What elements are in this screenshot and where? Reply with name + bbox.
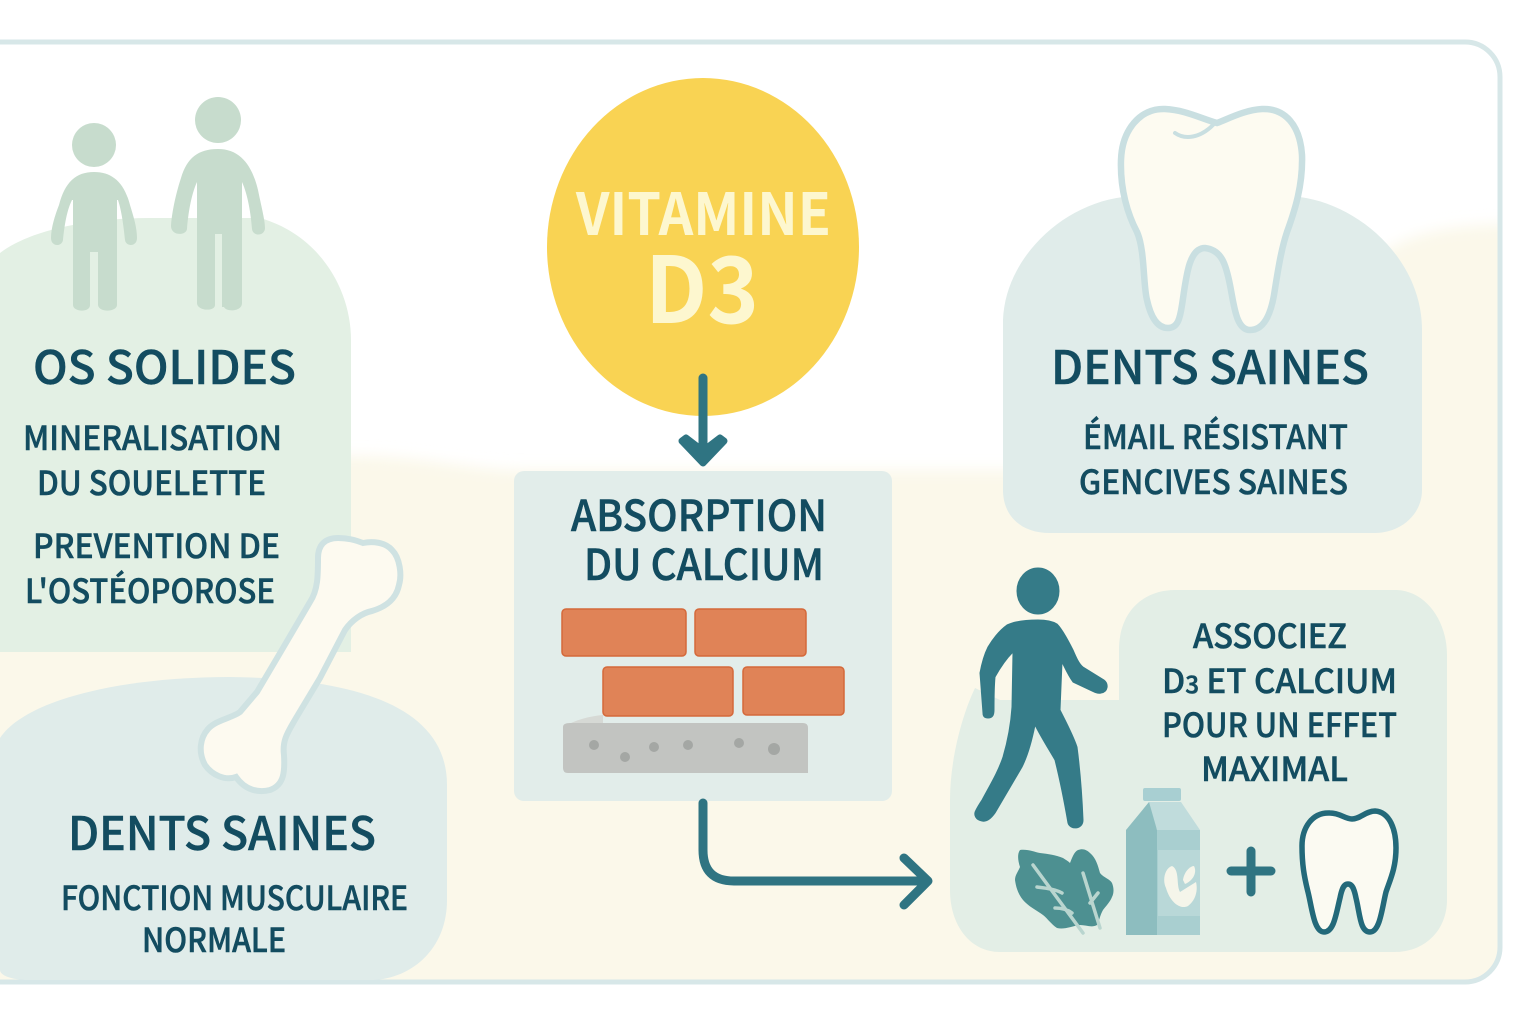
icon: bricks — [562, 609, 844, 716]
icon: bone — [201, 538, 400, 791]
text: prévention: PREVENTION DE — [33, 520, 280, 568]
heading: os solides: OS SOLIDES — [33, 332, 296, 398]
title: D3: D3 — [645, 217, 759, 350]
text: prévention: L'OSTÉOPOROSE — [25, 565, 275, 613]
icon: concrete base — [563, 715, 808, 773]
heading: dents saines gauche: DENTS SAINES — [68, 798, 376, 864]
text: associez: POUR UN EFFET — [1162, 699, 1397, 747]
icon: leafy greens — [1015, 849, 1114, 933]
panel: absorption du calcium — [514, 471, 892, 801]
text: associez — [1162, 610, 1397, 791]
panel: associez — [950, 568, 1447, 952]
panel: fonction musculaire — [0, 538, 447, 980]
panel: dents saines droite — [1003, 109, 1422, 533]
text: associez: MAXIMAL — [1201, 743, 1348, 791]
text: associez: D3 ET CALCIUM — [1162, 655, 1397, 703]
title: vitamine: VITAMINE — [575, 168, 831, 252]
heading: absorption: DU CALCIUM — [584, 531, 824, 593]
icon: two people — [51, 97, 265, 311]
icon: plus — [1231, 851, 1271, 892]
arrow: vitamin to absorption — [682, 378, 724, 463]
text: associez: ASSOCIEZ — [1193, 610, 1347, 658]
text: minéralisation: DU SOUELETTE — [37, 457, 266, 505]
text: fonction musculaire: NORMALE — [142, 914, 286, 962]
text: prévention — [25, 520, 280, 613]
panel: os solides — [0, 97, 351, 652]
text: minéralisation: MINERALISATION — [23, 412, 282, 460]
text: minéralisation — [23, 412, 282, 505]
text: fonction musculaire: FONCTION MUSCULAIRE — [61, 872, 408, 920]
heading: absorption: ABSORPTION — [571, 482, 827, 544]
text: émail gencives — [1079, 411, 1348, 504]
heading: absorption — [571, 482, 827, 593]
text: fonction musculaire — [61, 872, 408, 962]
icon: walking person — [975, 568, 1107, 828]
text: émail gencives: GENCIVES SAINES — [1079, 456, 1348, 504]
icon: tooth — [1121, 109, 1302, 330]
arrow: absorption to combo — [703, 803, 928, 905]
icon: milk carton — [1126, 788, 1200, 935]
icon: tooth outline — [1302, 811, 1396, 932]
heading: dents saines droite: DENTS SAINES — [1051, 332, 1369, 398]
vitamin D3 circle — [547, 78, 859, 416]
text: émail gencives: ÉMAIL RÉSISTANT — [1083, 411, 1348, 459]
